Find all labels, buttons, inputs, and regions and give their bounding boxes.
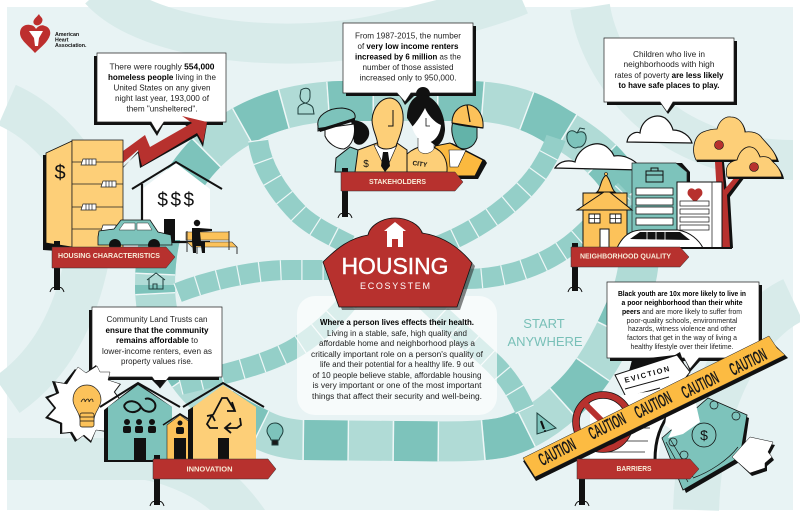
start anywhere label: ANYWHERE [507,334,583,349]
prohibition sign [576,395,630,449]
red rising arrow [123,116,207,168]
hospital building [677,182,722,248]
big loop track [155,101,639,441]
large yellow house with recycle icon [183,383,264,460]
callout: black youth: peers and are more likely to suffer from [622,307,742,316]
callout: low income renters: of very low income renters [358,42,459,51]
officer [318,108,369,172]
icon: home [384,222,406,247]
bench with person [186,220,237,254]
callout: children [604,38,737,114]
game board path [155,101,639,441]
eviction notice: EVICTION [623,364,670,385]
icon: apple [567,128,586,148]
money with wing [662,398,775,493]
callout: land trusts: property values rise. [121,357,193,366]
teal house [100,383,180,462]
post above barriers callout [572,268,578,290]
American Heart Association logo: American [55,32,79,38]
sign: barriers: BARRIERS [616,466,652,473]
apartment building [43,140,123,252]
text panel: housing description [297,296,497,415]
sign: innovation [153,459,276,479]
sign: barriers [577,459,699,479]
icon: person [298,88,314,114]
text panel: housing description: of 10 people believe stable, affordable housing [312,371,482,380]
callout: homeless people: There were roughly 554,000 [110,62,215,72]
scene: housing characteristics [43,116,237,292]
scene: barriers [523,336,788,506]
start anywhere label: START [523,316,565,331]
caution tape: CAUTION [678,367,722,403]
callout: black youth: poor-quality schools, environmental [626,316,738,325]
apartment building: $ [54,162,66,184]
post [338,168,352,218]
icon: small bulb [267,423,283,445]
subheading: ECOSYSTEM [360,281,430,291]
callout: homeless people: them "unsheltered". [126,104,198,114]
callout: land trusts: Community Land Trusts can [106,315,208,324]
callout: children: to have safe places to play. [618,81,720,90]
sign: neighborhood quality [571,247,689,267]
scene: neighborhood quality [555,116,784,292]
American Heart Association logo [20,14,87,53]
woman: CITY [412,160,428,169]
scene: innovation [45,365,276,506]
American Heart Association logo: Heart [55,38,69,44]
post [150,455,164,506]
callout: children: neighborhoods with high [624,60,714,69]
post [575,476,589,506]
callout: low income renters: increased by 6 million as the [355,52,462,62]
worker [435,105,487,179]
cloud lower [555,144,642,170]
callout: low income renters [343,23,476,105]
caution tape: CAUTION [631,387,675,423]
start anywhere label [507,316,583,349]
text panel: housing description: life and their potential for a healthy life. 9 out [320,360,475,369]
sign: housing characteristics: HOUSING CHARACTERISTICS [58,253,160,260]
caution tape: CAUTION [535,434,579,470]
callout: homeless people: homeless people living in the [108,73,217,82]
man with suit: $ [363,159,369,170]
office building [632,163,690,248]
starburst with bulb [45,365,121,443]
callout: children: Children who live in [633,50,705,59]
cloud upper [627,116,692,143]
post [50,241,64,292]
small yellow house [163,414,198,460]
callout: homeless people: United States on any given [114,84,210,92]
callout: black youth: factors that get in the way of living a [627,333,738,342]
sign: innovation: INNOVATION [186,466,232,474]
callout: black youth: a poor neighborhood than their white [622,298,742,307]
icon: home [147,273,165,289]
text panel: housing description: things that affect their security and well-being. [312,392,482,401]
scene: stakeholders [318,87,487,218]
callout: land trusts: lower-income renters, even as [102,347,212,356]
car [98,220,172,251]
callout: black youth: hazards, witness violence and other [628,324,736,333]
callout: land trusts [89,307,222,388]
train [616,230,732,249]
callout: black youth: healthy lifestyle over their lifetime. [630,342,734,351]
callout: low income renters: From 1987-2015, the number [355,32,461,40]
icon: warning triangle [537,413,556,434]
text panel: housing description: critically important role on a person's quality of [311,350,484,359]
text panel: housing description: affordable home and neighborhood plays a [319,339,476,348]
callout: children: rates of poverty are less likely [614,71,724,80]
callout: homeless people: night last year, 193,000 of [115,94,210,103]
eviction notice [615,352,690,405]
text panel: housing description: is very important or one of the most important [312,381,482,390]
sign: housing characteristics [52,247,175,268]
caution tape [523,336,788,481]
callout: black youth: Black youth are 10x more likely to live in [618,289,746,298]
callout: land trusts: ensure that the community [106,326,209,335]
sign: neighborhood quality: NEIGHBORHOOD QUALITY [580,254,671,260]
caution tape: CAUTION [585,408,629,444]
woman [400,87,447,172]
yellow school house [577,172,632,248]
callout: land trusts: remains affordable to [116,336,199,345]
housing ecosystem badge [323,218,475,310]
inner tracks [177,138,625,410]
document [590,390,700,460]
money with wing: $ [700,427,708,443]
callout: black youth [607,282,762,372]
callout: homeless people [94,53,226,136]
text panel: housing description: Where a person lives effects their health. [320,318,474,327]
man with suit [355,98,407,172]
house with dollar signs [132,162,222,242]
sign: stakeholders [341,172,463,191]
callout: low income renters: increased only to 950,000. [360,74,456,82]
callout: low income renters: number of those assisted [362,63,454,72]
sign: stakeholders: STAKEHOLDERS [369,179,426,186]
heading: HOUSING [342,253,448,279]
American Heart Association logo: Association. [55,43,87,49]
post [568,243,582,292]
trees [694,117,784,248]
house with dollar signs: $$$ [157,190,197,211]
text panel: housing description: Living in a stable, safe, high quality and [327,329,467,338]
